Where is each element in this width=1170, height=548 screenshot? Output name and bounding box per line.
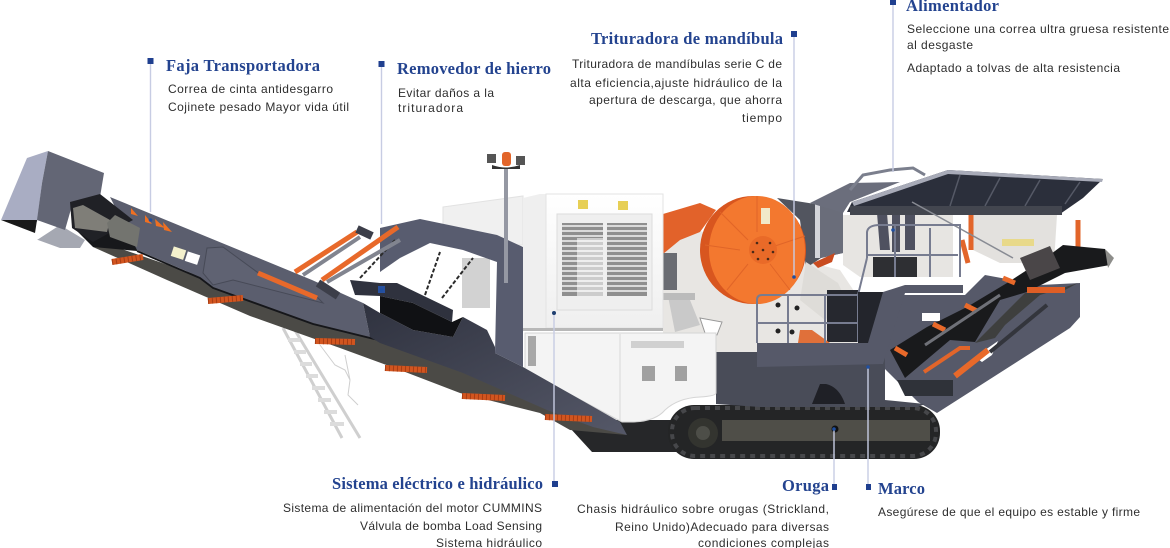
callout: Faja Transportadora: Correa de cinta antidesgarro [168, 82, 333, 96]
lamp mast [487, 152, 525, 283]
main steel frame [757, 285, 963, 367]
callout: Faja Transportadora: Faja Transportadora [166, 56, 320, 75]
callout: Trituradora de mandíbula: Trituradora de mandíbula [591, 29, 783, 48]
warning labels [171, 246, 200, 265]
spring feet [112, 257, 592, 419]
callout: Oruga [577, 427, 837, 548]
callout: Removedor de hierro: trituradora [398, 101, 463, 115]
stairs [858, 292, 885, 344]
black underframe at head pulley [72, 220, 140, 251]
belt edge line [137, 251, 400, 345]
drive motor and gearbox [70, 194, 140, 247]
callout: Faja Transportadora [148, 56, 349, 222]
callout: Marco: Asegúrese de que el equipo es estable y firme [878, 505, 1140, 519]
engine hood [523, 194, 663, 331]
callout: Alimentador [890, 0, 1169, 232]
callout: Trituradora de mandíbula: Trituradora de mandíbulas serie C de [572, 57, 782, 71]
hopper chute [1, 151, 104, 248]
chassis [716, 352, 925, 407]
orange flywheel [700, 196, 806, 304]
rear crawler [570, 420, 690, 452]
feeder hopper [810, 168, 1103, 215]
right tail frame [883, 275, 1080, 413]
crusher side gear [663, 253, 722, 335]
conveyor arm plate [203, 247, 323, 303]
main crawler track [668, 405, 940, 459]
callout: Marco [866, 365, 1140, 519]
feeder grille [462, 258, 490, 308]
callout: Marco: Marco [878, 479, 925, 498]
main conveyor lower band [93, 246, 627, 435]
callout: Oruga: Oruga [782, 476, 829, 495]
callout: Removedor de hierro: Removedor de hierro [397, 59, 551, 78]
callout: Trituradora de mandíbula: tiempo [742, 111, 782, 125]
engine hood rear wall [443, 196, 523, 245]
main conveyor body [110, 197, 370, 337]
callout: Faja Transportadora: Cojinete pesado Mayor vida útil [168, 100, 349, 114]
iron remover [350, 240, 473, 337]
callout: Sistema eléctrico e hidráulico: Válvula de bomba Load Sensing [360, 519, 542, 533]
callout: Sistema eléctrico e hidráulico: Sistema de alimentación del motor CUMMINS [283, 501, 542, 515]
callout: Alimentador: Adaptado a tolvas de alta resistencia [907, 61, 1120, 75]
machine illustration [1, 151, 1114, 459]
feeder white panels [843, 213, 1057, 277]
rear orange flywheel [663, 203, 716, 254]
wheel well [812, 384, 845, 404]
callout: Alimentador: al desgaste [907, 38, 973, 52]
crusher hatch and black holes [776, 262, 858, 343]
chevron markings [131, 208, 172, 232]
callout: Removedor de hierro [378, 59, 551, 292]
callout: Trituradora de mandíbula: apertura de descarga, que ahorra [589, 93, 782, 107]
feed chute [363, 303, 627, 435]
callout: Trituradora de mandíbula [570, 29, 797, 279]
crusher wedge [813, 253, 835, 268]
support arch [380, 219, 523, 367]
discharge conveyor [890, 245, 1114, 396]
callout: Removedor de hierro: Evitar daños a la [398, 86, 494, 100]
dark jaw block behind wheel [777, 198, 843, 268]
jaw crusher body [663, 229, 860, 352]
power unit casing [525, 333, 716, 422]
callout: Sistema eléctrico e hidráulico: Sistema eléctrico e hidráulico [332, 474, 543, 493]
callout: Oruga: Chasis hidráulico sobre orugas (Strickland, [577, 502, 829, 516]
callout: Trituradora de mandíbula: alta eficiencia,ajuste hidráulico de la [570, 76, 782, 90]
jaw block side face [820, 204, 843, 258]
hydraulic cylinders [258, 227, 400, 298]
feeder hydraulic cylinders [912, 202, 1078, 263]
callout: Oruga: Reino Unido)Adecuado para diversas [615, 520, 829, 534]
tail cut-outs [922, 313, 998, 362]
callout: Alimentador: Seleccione una correa ultra gruesa resistente [907, 22, 1169, 36]
guard rails [757, 225, 960, 343]
access ladder [283, 327, 360, 438]
callout: Sistema eléctrico e hidráulico [283, 311, 558, 548]
jaw block strip [815, 203, 820, 258]
